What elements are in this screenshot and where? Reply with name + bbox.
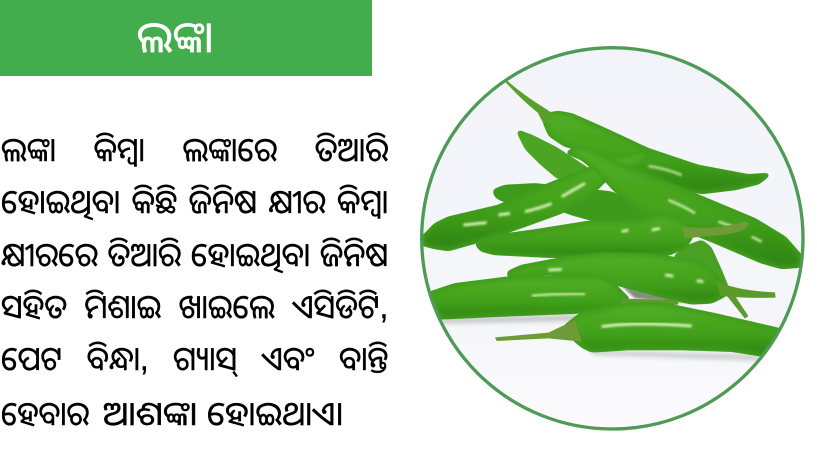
chilli: back right short xyxy=(675,242,748,319)
text block: body paragraph xyxy=(1,131,388,432)
text block: body paragraph: ହୋଇଥିବା କିଛି ଜିନିଷ କ୍ଷୀର କିମ୍ବା xyxy=(1,183,388,220)
text block: body paragraph: ପେଟ ବିନ୍ଧା, ଗ୍ୟାସ୍ ଏବଂ ବାନ୍ତି xyxy=(1,340,388,377)
chilli: second back xyxy=(518,132,588,177)
chilli: lower left xyxy=(430,277,678,318)
text block: body paragraph: ହୋଇଥାଏ। xyxy=(207,395,344,432)
title banner xyxy=(0,0,372,76)
chilli: middle horizontal xyxy=(477,216,749,257)
text block: body paragraph: କ୍ଷୀରରେ ତିଆରି ହୋଇଥିବା ଜିନିଷ xyxy=(1,236,388,273)
photo: green chillies in a circle xyxy=(420,46,805,431)
text block: body paragraph: ଆଶଙ୍କା xyxy=(103,395,197,432)
chilli: lower middle xyxy=(508,254,776,303)
text block: body paragraph: ସହିତ ମିଶାଇ ଖାଇଲେ ଏସିଡିଟି, xyxy=(1,288,388,325)
text block: body paragraph: ହେବାର xyxy=(1,395,89,432)
chilli: long diagonal xyxy=(422,151,648,249)
chilli: top back xyxy=(505,81,768,192)
chilli: low back xyxy=(494,185,655,222)
chilli: large diagonal xyxy=(568,147,801,267)
text block: body paragraph: ଲଙ୍କା କିମ୍ବା ଲଙ୍କାରେ ତିଆରି xyxy=(1,131,388,168)
shadows xyxy=(438,315,582,323)
chilli: bottom xyxy=(495,304,780,355)
circle border xyxy=(422,48,803,429)
title banner: ଲଙ୍କା xyxy=(137,14,213,62)
